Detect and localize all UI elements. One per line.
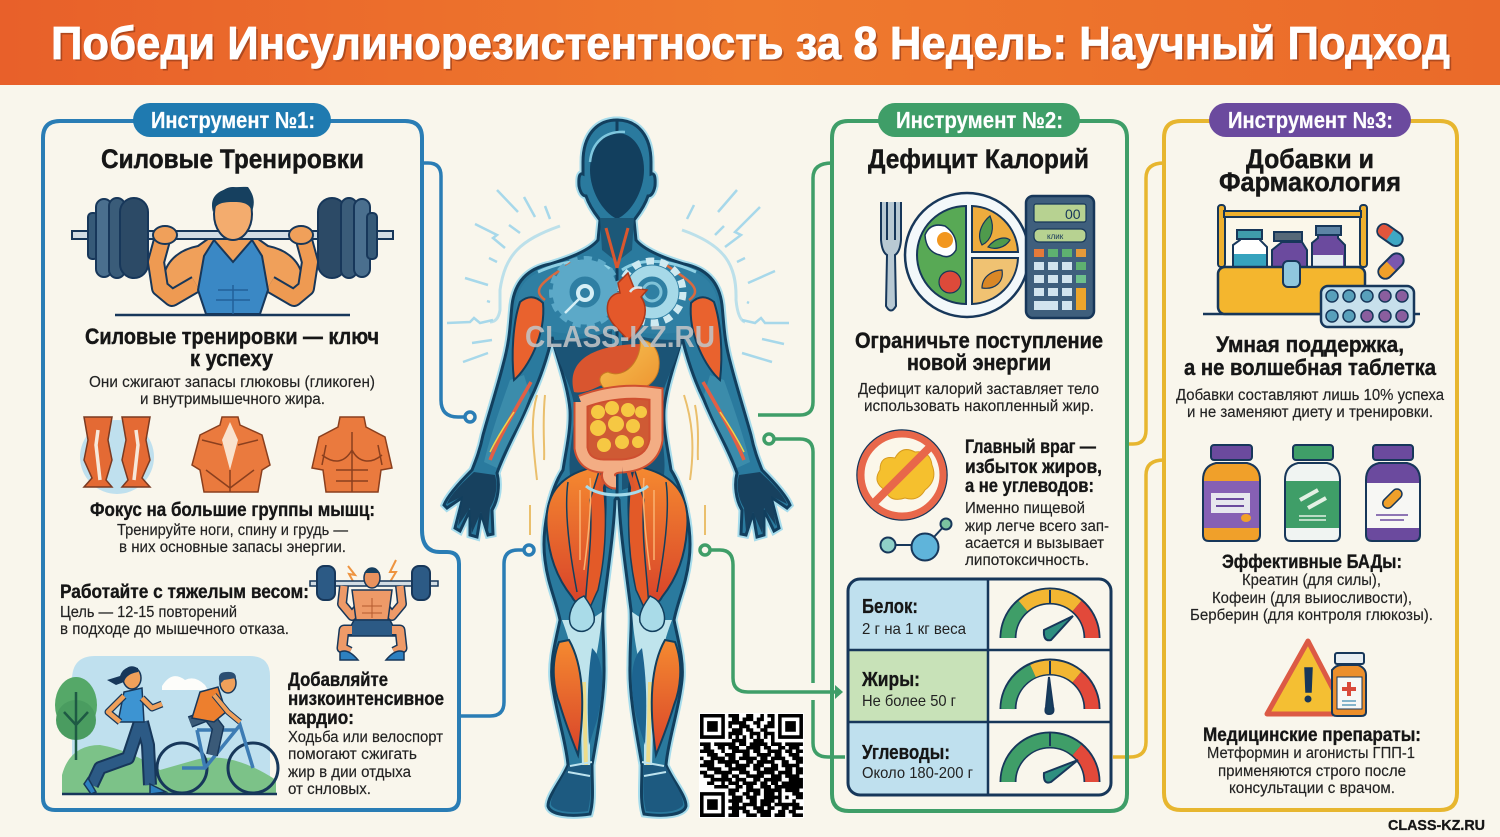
row: protein <box>862 596 966 638</box>
text: main enemy: Главный враг — <box>965 437 1096 458</box>
text: main enemy: жир легче всего зап- <box>965 518 1109 535</box>
body silhouette <box>444 120 790 815</box>
illustration: energy sparks around body <box>447 190 789 535</box>
text: burn glycogen <box>89 374 375 408</box>
text: main enemy: липотоксичность. <box>965 552 1089 569</box>
text: effective supplements: Эффективные БАДы: <box>1222 552 1402 573</box>
subheading: key to success <box>85 324 379 371</box>
row: protein: Белок: <box>862 596 918 618</box>
subheading: limit new energy <box>855 328 1103 375</box>
row: fats: Жиры: <box>861 669 920 691</box>
text: low-intensity cardio: Ходьба или велоспорт <box>288 729 443 746</box>
title banner: Победи Инсулинорезистентность за 8 Недель: Научный Подход <box>53 19 1452 71</box>
row: fats <box>861 669 956 710</box>
icon: chest muscles <box>312 417 392 492</box>
subheading: limit new energy: Ограничьте поступление <box>855 328 1103 353</box>
connector: tool 2 to torso <box>758 163 832 415</box>
icon: warning triangle with medicine bottle <box>1267 641 1366 716</box>
icon: purple-orange supplement bottle <box>1203 445 1260 541</box>
text: low-intensity cardio: кардио: <box>288 708 354 729</box>
QR code <box>699 713 804 818</box>
heading: supplements and pharmacology <box>1219 144 1401 197</box>
panel: tool 2 calorie deficit <box>832 103 1127 811</box>
text: effective supplements <box>1190 552 1433 624</box>
subheading: smart support <box>1184 332 1437 380</box>
icon: calculator: 00 <box>1065 206 1081 222</box>
corner watermark: CLASS-KZ.RU <box>1388 818 1485 834</box>
row: carbohydrates: Около 180-200 г <box>862 765 973 782</box>
icon: leg muscles <box>80 417 154 494</box>
icon: molecule <box>880 518 952 560</box>
text: low-intensity cardio: низкоинтенсивное <box>288 689 444 710</box>
icon: purple supplement bottle <box>1366 445 1420 541</box>
subheading: smart support: Умная поддержка, <box>1216 332 1404 357</box>
text: focus on large muscle groups: Тренируйте ноги, спину и грудь — <box>117 522 348 539</box>
icon: liver <box>572 344 642 392</box>
badge: tool 3 <box>1209 103 1411 137</box>
table: macronutrient limits <box>848 579 1111 795</box>
connector: tool 3 to tool 2 lower <box>1113 460 1164 757</box>
text: medical drugs <box>1203 725 1421 797</box>
text: effective supplements: Берберин (для контроля глюкозы). <box>1190 607 1433 624</box>
icon: gears <box>552 259 683 325</box>
text: heavy weight: Цель — 12-15 повторений <box>60 604 237 621</box>
gauge: protein <box>1008 590 1092 640</box>
icon: calculator <box>1026 196 1094 318</box>
watermark: CLASS-KZ.RU <box>525 319 715 354</box>
text: focus on large muscle groups: в них основные запасы энергии. <box>119 539 346 556</box>
text: effective supplements: Кофеин (для выиосливости), <box>1212 590 1412 607</box>
text: burn glycogen: Они сжигают запасы глюковы (гликоген) <box>89 374 375 391</box>
text: medical drugs: Медицинские препараты: <box>1203 725 1421 746</box>
row: carbohydrates: Углеводы: <box>862 742 950 764</box>
icon: plate with food <box>905 193 1029 317</box>
subheading: limit new energy: новой энергии <box>907 350 1051 375</box>
title banner: Победи Инсулинорезистентность за 8 Недель: Научный Подход <box>51 17 1450 69</box>
text: heavy weight: Работайте с тяжелым весом: <box>60 582 309 603</box>
title banner <box>0 0 1500 85</box>
text: main enemy: избыток жиров, <box>965 457 1102 478</box>
icon: back muscles <box>192 417 270 492</box>
subheading: key to success: к успеху <box>190 346 274 371</box>
heading: strength training: Силовые Тренировки <box>101 144 364 174</box>
text: supplements share <box>1176 387 1444 421</box>
icon: calculator: клик <box>1047 232 1064 241</box>
panel: tool 3 supplements and pharmacology <box>1164 103 1457 810</box>
row: protein: 2 г на 1 кг веса <box>862 621 966 638</box>
muscles and limbs <box>447 133 787 812</box>
connector: legs to fats row with arrow <box>700 545 843 699</box>
badge: tool 1 <box>133 103 331 137</box>
text: heavy weight: в подходе до мышечного отказа. <box>60 621 289 638</box>
illustration: anatomical body figure <box>444 120 790 815</box>
row: carbohydrates <box>862 742 973 782</box>
highlight on head <box>590 132 625 162</box>
text: low-intensity cardio <box>288 670 444 798</box>
text: effective supplements: Креатин (для силы), <box>1242 572 1381 589</box>
gauge: carbohydrates <box>1008 733 1092 783</box>
text: supplements share: и не заменяют диету и тренировки. <box>1187 404 1433 421</box>
connector: tool 1 to body upper <box>423 163 475 422</box>
text: main enemy: асается и вызывает <box>965 535 1104 552</box>
badge: tool 3: Инструмент №3: <box>1228 107 1393 133</box>
heading: supplements and pharmacology: Фармакология <box>1219 167 1401 197</box>
icon: green supplement bottle <box>1285 445 1340 541</box>
text: heavy weight <box>60 582 309 638</box>
text: medical drugs: Метформин и агонисты ГПП-1 <box>1207 745 1415 762</box>
text: medical drugs: применяются строго после <box>1218 763 1406 780</box>
text: main enemy <box>965 437 1109 569</box>
text: medical drugs: консультации с врачом. <box>1229 780 1395 797</box>
subheading: smart support: а не волшебная таблетка <box>1184 355 1437 380</box>
heading: calorie deficit: Дефицит Калорий <box>868 144 1089 174</box>
text: low-intensity cardio: от снловых. <box>288 781 371 798</box>
text: focus on large muscle groups <box>90 500 375 556</box>
badge: tool 2 <box>878 103 1080 137</box>
connector: tool 2 to carbs row <box>764 434 845 757</box>
connector: tool 3 to tool 2 upper <box>1129 163 1164 444</box>
panel: tool 1 strength training <box>43 103 459 810</box>
icon: toolbox with bottles and pills <box>1203 205 1420 327</box>
text: deficit explanation: использовать накопленный жир. <box>864 398 1094 415</box>
icon: squatting lifter <box>310 560 438 660</box>
icon: stomach <box>600 340 659 391</box>
text: deficit explanation <box>858 381 1099 415</box>
text: low-intensity cardio: Добавляйте <box>288 670 388 691</box>
icon: intestines <box>581 392 656 482</box>
text: deficit explanation: Дефицит калорий заставляет тело <box>858 381 1099 398</box>
icon: fork <box>881 202 901 310</box>
icon: crossed-out fat <box>857 430 947 520</box>
text: focus on large muscle groups: Фокус на большие группы мышц: <box>90 500 375 521</box>
text: burn glycogen: и внутримышечного жира. <box>140 391 325 408</box>
badge: tool 2: Инструмент №2: <box>896 107 1063 133</box>
subheading: key to success: Силовые тренировки — ключ <box>85 324 379 349</box>
heading: supplements and pharmacology: Добавки и <box>1246 144 1374 174</box>
text: supplements share: Добавки составляют лишь 10% успеха <box>1176 387 1444 404</box>
illustration: runner and cyclist <box>55 656 278 794</box>
text: main enemy: Именно пищевой <box>965 500 1085 517</box>
icon: man lifting barbell <box>72 187 393 315</box>
icon: heart <box>607 273 647 340</box>
row: fats: Не более 50 г <box>862 693 956 710</box>
badge: tool 1: Инструмент №1: <box>151 107 315 133</box>
gauge: fats <box>1008 661 1092 714</box>
connector: tool 1 to legs <box>459 545 534 716</box>
text: low-intensity cardio: помогают сжигать <box>288 746 417 763</box>
text: low-intensity cardio: жир в дии отдыха <box>288 764 411 781</box>
text: main enemy: а не углеводов: <box>965 476 1094 497</box>
